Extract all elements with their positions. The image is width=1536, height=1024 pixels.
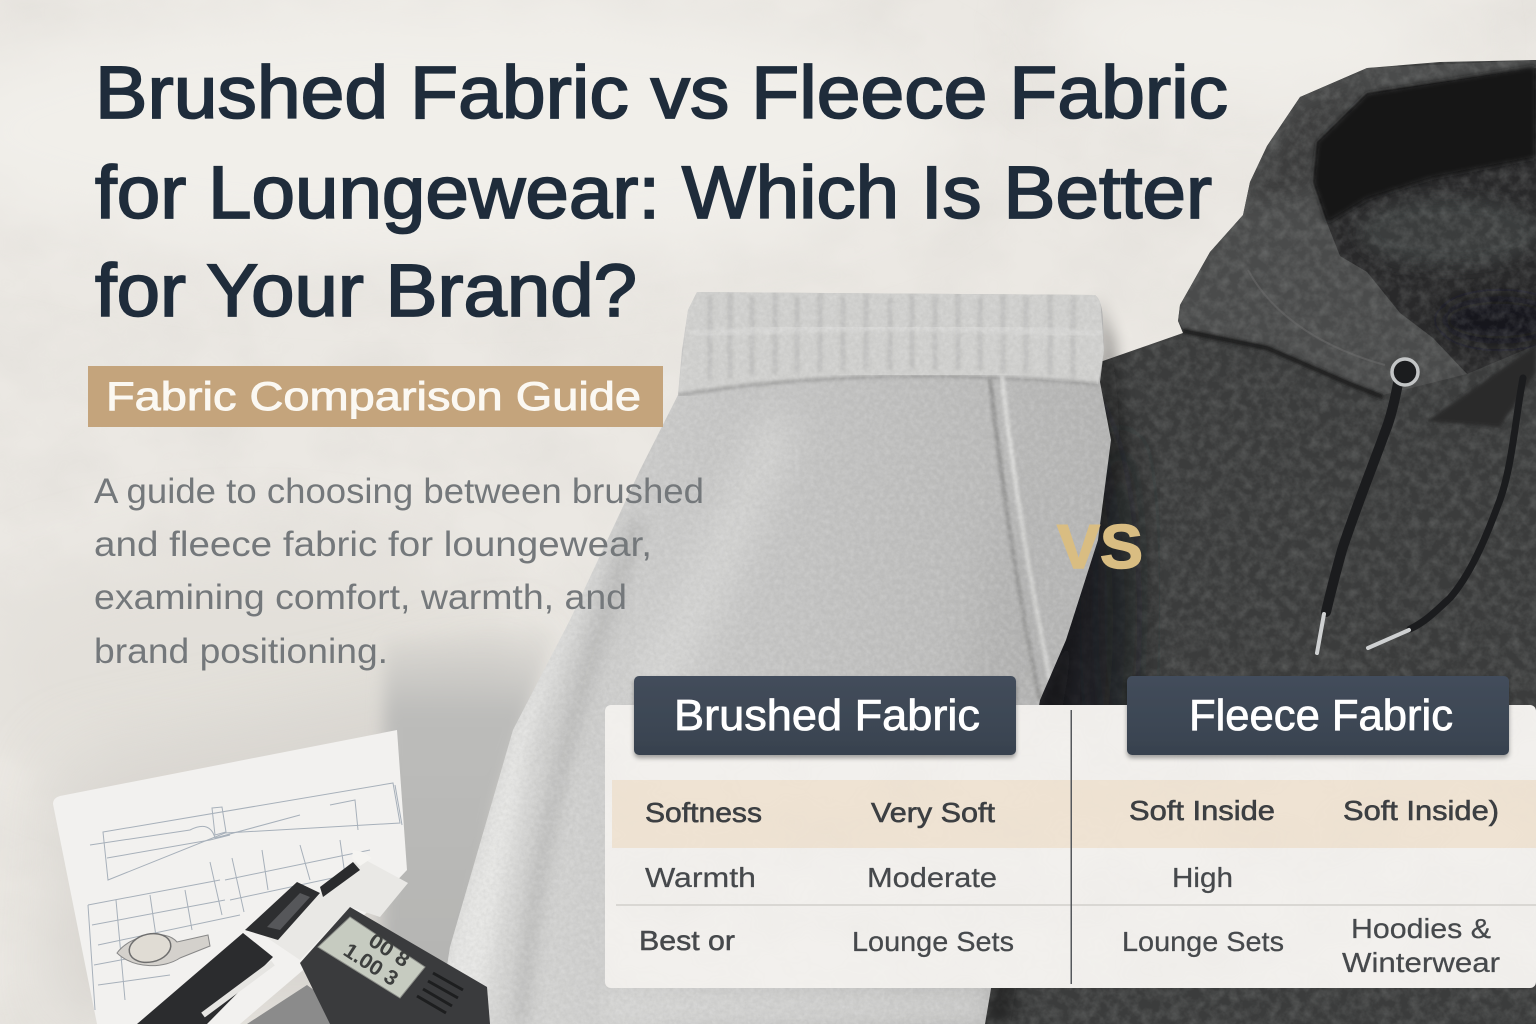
title: for Loungewear: Which Is Better (95, 151, 1212, 234)
best for row: Lounge Sets (1122, 926, 1284, 957)
softness row: Soft Inside (1129, 795, 1275, 826)
leg folds (448, 614, 574, 986)
fabric below caliper (247, 985, 360, 1024)
hood outer flap (1178, 60, 1536, 395)
title: Brushed Fabric vs Fleece Fabric (95, 51, 1228, 134)
brushed fabric header (634, 676, 1016, 755)
softness row: Soft Inside) (1343, 795, 1499, 826)
best for row: Best or (639, 925, 735, 956)
title: for Your Brand? (95, 249, 637, 332)
best for row (639, 913, 1500, 978)
fabric texture (960, 50, 1536, 1024)
brushed fabric header: Brushed Fabric (674, 691, 980, 740)
table panel (605, 705, 1536, 988)
collar flap (1427, 345, 1536, 427)
caliper vent (417, 973, 463, 1013)
warmth row (645, 862, 1233, 893)
pocket (990, 378, 1040, 700)
digital caliper: 1.00 3 (339, 939, 402, 991)
fleece fabric header (1127, 676, 1509, 755)
caliper grip (245, 882, 320, 940)
intro paragraph: and fleece fabric for loungewear, (94, 525, 652, 564)
best for row: Winterwear (1342, 947, 1500, 978)
warmth row: High (1172, 862, 1233, 893)
hood neck interior (1313, 68, 1536, 374)
intro paragraph (94, 472, 704, 671)
eyelet (1392, 359, 1418, 385)
reference paper with sketch lines (53, 730, 407, 1024)
digital caliper: 00 8 (364, 929, 414, 972)
badge: fabric comparison guide: Fabric Comparison Guide (106, 375, 641, 419)
drawstring left (1326, 378, 1523, 629)
metal aglets (1317, 614, 1409, 653)
intro paragraph: examining comfort, warmth, and (94, 578, 627, 617)
row divider (616, 904, 1536, 906)
caliper rack (320, 862, 360, 897)
hood interior shadow (1313, 66, 1536, 223)
pants: brushed grey (430, 280, 1130, 1024)
best for row: Hoodies & (1351, 913, 1491, 944)
badge: fabric comparison guide (88, 366, 663, 427)
title (95, 51, 1228, 332)
drawstring right (1410, 378, 1523, 629)
warmth row: Moderate (867, 862, 997, 893)
caliper body (300, 907, 490, 1024)
hoodie body (960, 50, 1536, 1024)
intro paragraph: A guide to choosing between brushed (94, 472, 704, 511)
caliper slider (260, 857, 408, 960)
washer on paper (117, 930, 210, 966)
shadow fold of fabric under pants (40, 620, 560, 1024)
softness row (645, 795, 1499, 828)
caliper beam (137, 933, 273, 1024)
softness row: Very Soft (871, 797, 995, 828)
caliper screen (318, 917, 425, 998)
softness row: Softness (645, 797, 762, 828)
hood under-fold shadow (1183, 331, 1383, 397)
hood seam (1248, 270, 1385, 365)
best for row: Lounge Sets (852, 926, 1014, 957)
fabric grain (452, 718, 526, 964)
column divider (1070, 710, 1072, 984)
warmth row: Warmth (645, 862, 756, 893)
softness row band (612, 780, 1536, 848)
digital caliper (137, 850, 490, 1024)
panel mottling (605, 705, 1536, 988)
waistband (678, 292, 1104, 395)
comparison table (605, 676, 1536, 988)
hoodie: dark fleece (960, 50, 1536, 1024)
intro paragraph: brand positioning. (94, 632, 388, 671)
fleece fabric header: Fleece Fabric (1189, 691, 1453, 740)
vs label: VS (1057, 513, 1143, 582)
